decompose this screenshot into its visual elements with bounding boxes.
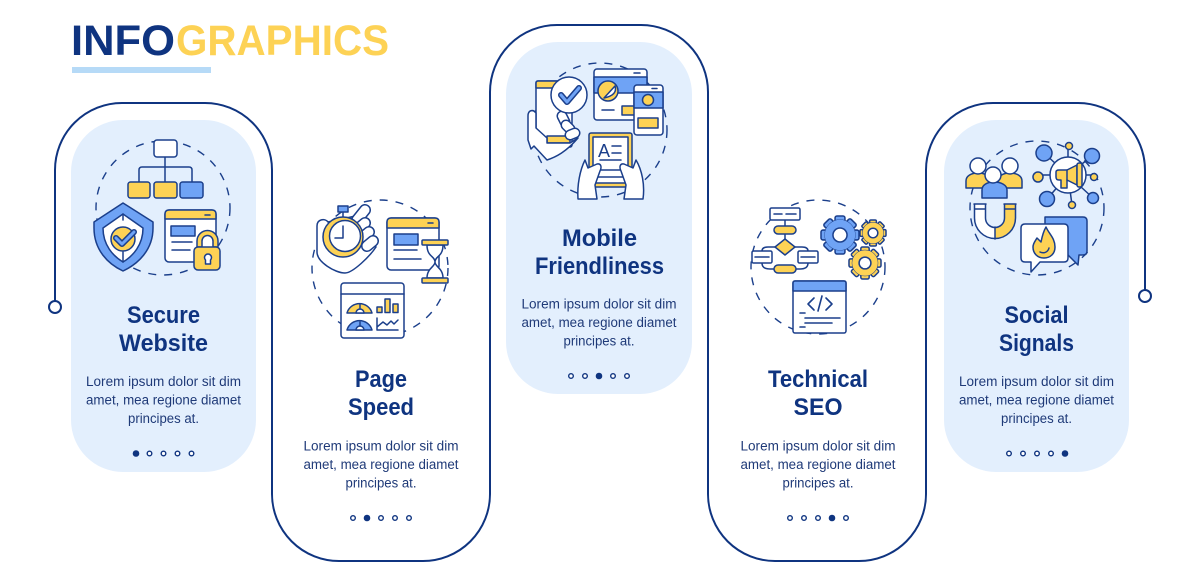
pagination dots 2 bbox=[351, 515, 411, 521]
text: Page Speed body bbox=[304, 438, 459, 490]
text: Secure Website body: principes at. bbox=[128, 411, 199, 426]
heading: Social Signals: Signals bbox=[999, 330, 1074, 357]
text: Mobile Friendliness body: Lorem ipsum dolor sit dim bbox=[522, 296, 676, 312]
text: Technical SEO body bbox=[740, 438, 896, 490]
text: Mobile Friendliness body: amet, mea regione diamet bbox=[522, 315, 677, 330]
heading: Social Signals: Social bbox=[1004, 302, 1068, 329]
icon: page speed bbox=[312, 200, 448, 338]
text: Social Signals body bbox=[959, 374, 1114, 426]
heading: Secure Website: Secure bbox=[127, 302, 200, 329]
title underline bbox=[72, 67, 211, 73]
heading: Page Speed bbox=[348, 366, 414, 421]
right connector end dot bbox=[1139, 290, 1151, 302]
text: Secure Website body: Lorem ipsum dolor sit dim bbox=[86, 374, 241, 389]
heading: Mobile Friendliness: Friendliness bbox=[535, 253, 664, 280]
heading: Page Speed: Speed bbox=[348, 394, 414, 421]
pagination dots 3 bbox=[569, 373, 629, 379]
heading: Technical SEO: SEO bbox=[794, 394, 842, 421]
text: Page Speed body: Lorem ipsum dolor sit dim bbox=[304, 438, 458, 454]
text: Mobile Friendliness body: principes at. bbox=[564, 334, 634, 348]
text: Secure Website body: amet, mea regione diamet bbox=[86, 392, 241, 408]
text: Page Speed body: amet, mea regione diamet bbox=[304, 457, 459, 472]
text: Technical SEO body: principes at. bbox=[782, 476, 854, 490]
heading: Mobile Friendliness bbox=[535, 225, 664, 280]
heading: Technical SEO bbox=[768, 366, 868, 421]
pagination dots 1 bbox=[133, 451, 194, 456]
text: Technical SEO body: amet, mea regione diamet bbox=[740, 457, 896, 472]
heading: Social Signals bbox=[999, 302, 1074, 357]
left connector end dot bbox=[49, 301, 61, 313]
icon: secure website bbox=[94, 140, 230, 275]
text: Social Signals body: amet, mea regione diamet bbox=[959, 392, 1114, 408]
heading: Mobile Friendliness: Mobile bbox=[562, 225, 637, 252]
heading: Secure Website bbox=[119, 302, 208, 357]
pagination dots 5 bbox=[1007, 451, 1068, 456]
text: Mobile Friendliness body bbox=[522, 296, 677, 348]
icon: technical seo bbox=[751, 200, 886, 334]
icon: mobile friendliness: A bbox=[598, 141, 610, 161]
icon: social signals bbox=[966, 141, 1104, 275]
text: Technical SEO body: Lorem ipsum dolor sit dim bbox=[740, 438, 896, 454]
title: GRAPHICS bbox=[176, 17, 389, 65]
title bbox=[71, 17, 389, 65]
heading: Technical SEO: Technical bbox=[768, 366, 868, 393]
text: Social Signals body: principes at. bbox=[1001, 411, 1072, 426]
icon: mobile friendliness bbox=[528, 63, 667, 199]
text: Social Signals body: Lorem ipsum dolor sit dim bbox=[959, 374, 1114, 389]
text: Page Speed body: principes at. bbox=[346, 476, 416, 490]
heading: Page Speed: Page bbox=[355, 366, 407, 393]
heading: Secure Website: Website bbox=[119, 330, 208, 357]
pagination dots 4 bbox=[788, 515, 848, 521]
panel: light background cards bbox=[71, 42, 1129, 472]
text: Secure Website body bbox=[86, 374, 241, 426]
title: INFO bbox=[71, 17, 175, 65]
